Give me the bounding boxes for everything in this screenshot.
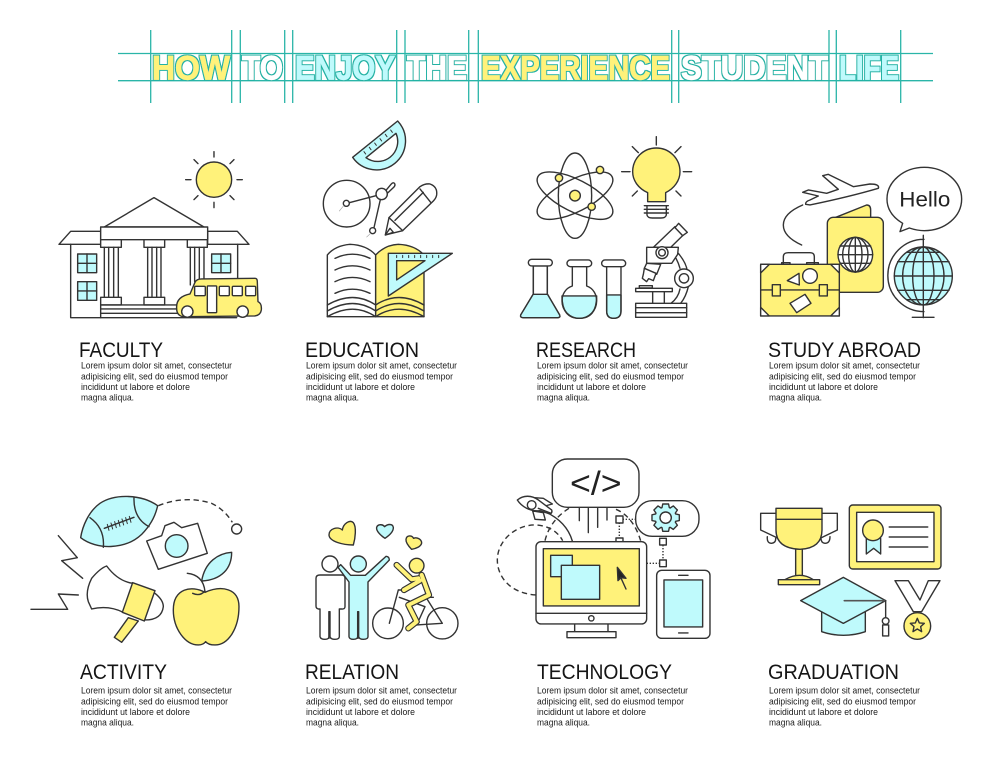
heading: study abroad: STUDY ABROAD [768,339,921,362]
text block: graduation: Lorem ipsum dolor sit amet, consectetur [769,686,920,696]
title: THE [407,49,467,87]
icon: microscope [636,223,693,317]
text block: research: adipisicing elit, sed do eiusmod tempor [537,371,684,381]
text block: graduation: adipisicing elit, sed do eiusmod tempor [769,696,916,706]
title: ENJOY [295,49,395,87]
text block: education: incididunt ut labore et dolore [306,382,415,392]
text block: activity: adipisicing elit, sed do eiusmod tempor [81,696,228,706]
text block: research: Lorem ipsum dolor sit amet, consectetur [537,361,688,371]
icon: plane, passport, suitcase, speech bubble and globe [761,167,962,318]
text block: faculty: incididunt ut labore et dolore [81,382,190,392]
icon: people, hearts and cyclist [316,521,458,639]
icon: monitor, tablet, code bubble, gear and rocket: </> [570,465,622,502]
text block: research: magna aliqua. [537,393,590,403]
icon: trophy, certificate, graduation cap and medal [761,505,941,639]
text block: technology: magna aliqua. [537,718,590,728]
panel: activity [31,496,242,728]
icon: plane, passport, suitcase, speech bubble and globe: Hello [899,187,950,211]
text block: activity: incididunt ut labore et dolore [81,707,190,717]
title: HOW [152,49,231,87]
panel: education [305,121,457,403]
text block: study abroad: incididunt ut labore et dolore [769,382,878,392]
heading: faculty: FACULTY [79,339,163,362]
text block: technology: incididunt ut labore et dolore [537,707,646,717]
panel: graduation [761,505,941,728]
text block: technology: Lorem ipsum dolor sit amet, consectetur [537,686,688,696]
text block: faculty: magna aliqua. [81,393,134,403]
text block: faculty: adipisicing elit, sed do eiusmod tempor [81,371,228,381]
text block: study abroad [769,361,920,403]
heading: research: RESEARCH [536,339,636,362]
text block: education: adipisicing elit, sed do eiusmod tempor [306,371,453,381]
text block: relation [306,686,457,728]
text block: relation: adipisicing elit, sed do eiusmod tempor [306,696,453,706]
text block: technology [537,686,688,728]
text block: faculty [81,361,232,403]
text block: faculty: Lorem ipsum dolor sit amet, consectetur [81,361,232,371]
text block: research: incididunt ut labore et dolore [537,382,646,392]
heading: activity: ACTIVITY [80,661,167,684]
text block: activity [81,686,232,728]
text block: education: Lorem ipsum dolor sit amet, consectetur [306,361,457,371]
panel: relation [305,521,458,728]
title: EXPERIENCE [481,49,670,87]
heading: education: EDUCATION [305,339,419,362]
text block: education: magna aliqua. [306,393,359,403]
title: LIFE [839,49,899,87]
text block: graduation [769,686,920,728]
text block: study abroad: adipisicing elit, sed do eiusmod tempor [769,371,916,381]
text block: graduation: magna aliqua. [769,718,822,728]
text block: education [306,361,457,403]
panel: faculty [59,152,261,403]
icon: football, camera, megaphone and apple [31,496,242,645]
icon: protractor, compass, pencil, book and set square [323,121,452,317]
panel: research [521,137,693,403]
heading: graduation: GRADUATION [768,661,899,684]
title [118,30,933,103]
icon: atom, light bulb and flasks [521,137,692,318]
text block: graduation: incididunt ut labore et dolore [769,707,878,717]
heading: relation: RELATION [305,661,399,684]
text block: study abroad: Lorem ipsum dolor sit amet, consectetur [769,361,920,371]
text block: research [537,361,688,403]
text block: relation: magna aliqua. [306,718,359,728]
icon: monitor, tablet, code bubble, gear and rocket [497,459,710,638]
text block: relation: Lorem ipsum dolor sit amet, consectetur [306,686,457,696]
title: TO [242,49,283,87]
text block: study abroad: magna aliqua. [769,393,822,403]
heading: technology: TECHNOLOGY [537,661,672,684]
title: STUDENT [681,49,828,87]
text block: relation: incididunt ut labore et dolore [306,707,415,717]
text block: technology: adipisicing elit, sed do eiusmod tempor [537,696,684,706]
panel: technology [497,459,710,728]
icon: faculty building with sun and school bus [59,152,261,318]
panel: study abroad [761,167,962,403]
text block: activity: Lorem ipsum dolor sit amet, consectetur [81,686,232,696]
text block: activity: magna aliqua. [81,718,134,728]
